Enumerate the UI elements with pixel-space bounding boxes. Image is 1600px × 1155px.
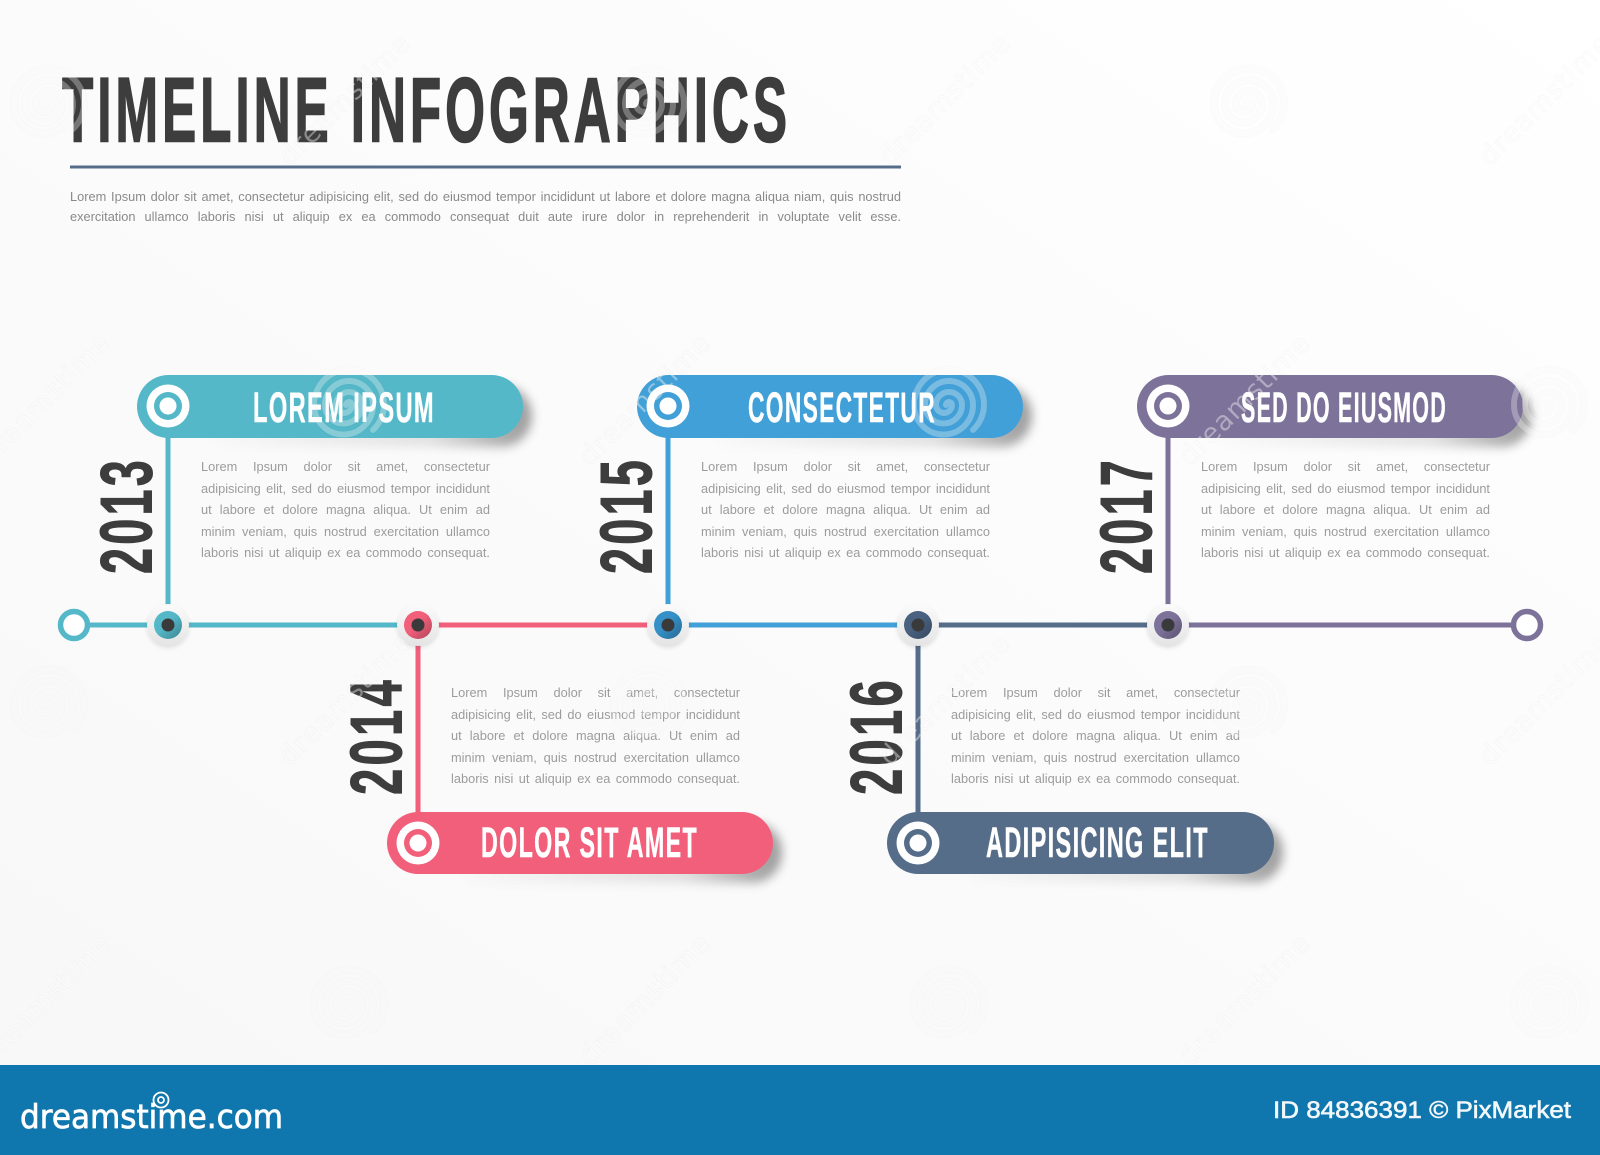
intro text: Lorem Ipsum dolor sit amet, consectetur adipisicing elit, sed do eiusmod tempor incididunt ut labore et dolore magna aliqua niam, quis nostrud — [70, 189, 901, 204]
body text: minim veniam, quis nostrud exercitation ullamco — [1201, 524, 1490, 539]
logo spiral — [154, 1092, 168, 1108]
connector — [1166, 430, 1170, 605]
body text: adipisicing elit, sed do eiusmod tempor incididunt — [201, 481, 490, 496]
body text: Lorem Ipsum dolor sit amet, consectetur — [1201, 459, 1490, 474]
logo wordmark: dreamstime.com — [20, 1097, 283, 1136]
body text: adipisicing elit, sed do eiusmod tempor incididunt — [701, 481, 990, 496]
footer bar — [0, 1065, 1600, 1155]
body text: adipisicing elit, sed do eiusmod tempor incididunt — [451, 707, 740, 722]
connector — [166, 430, 170, 605]
body text — [951, 682, 1240, 794]
body text: ut labore et dolore magna aliqua. Ut enim ad — [701, 502, 990, 517]
pill — [1137, 375, 1523, 438]
axis segment: slate — [918, 622, 1168, 628]
intro text — [70, 187, 901, 229]
connector — [916, 640, 920, 820]
connector — [666, 430, 670, 605]
pill icon — [1146, 384, 1190, 428]
axis segment: teal — [74, 622, 418, 628]
body text: minim veniam, quis nostrud exercitation ullamco — [951, 750, 1240, 765]
panel: 2017 sed do eiusmod — [1086, 375, 1532, 648]
body text: ut labore et dolore magna aliqua. Ut enim ad — [951, 728, 1240, 743]
pill — [137, 375, 523, 438]
end marker — [1514, 612, 1540, 638]
pill label: LOREM IPSUM — [253, 384, 435, 432]
watermark text: dreamstime — [873, 628, 1017, 772]
pill icon — [896, 822, 940, 864]
pill label: CONSECTETUR — [748, 384, 936, 432]
timeline axis — [74, 622, 1527, 628]
body text: laboris nisi ut aliquip ex ea commodo consequat. — [451, 771, 740, 786]
node — [397, 604, 439, 648]
panel: 2014 dolor sit amet — [336, 604, 782, 883]
watermark text: dreamstime — [273, 628, 417, 772]
body text: minim veniam, quis nostrud exercitation ullamco — [701, 524, 990, 539]
year: 2015 — [586, 457, 668, 574]
pill — [887, 812, 1274, 874]
body text — [1201, 456, 1490, 568]
body text: ut labore et dolore magna aliqua. Ut enim ad — [451, 728, 740, 743]
body text: minim veniam, quis nostrud exercitation ullamco — [451, 750, 740, 765]
year: 2014 — [336, 677, 418, 795]
body text: Lorem Ipsum dolor sit amet, consectetur — [951, 685, 1240, 700]
pill shadow — [1200, 385, 1532, 447]
body text: Lorem Ipsum dolor sit amet, consectetur — [201, 459, 490, 474]
pill icon — [646, 384, 690, 428]
pill — [637, 375, 1023, 438]
body text — [201, 456, 490, 568]
node — [647, 604, 689, 648]
node — [897, 604, 939, 648]
pill shadow — [950, 822, 1283, 883]
watermark text: dreamstime — [1173, 928, 1317, 1072]
body text: Lorem Ipsum dolor sit amet, consectetur — [451, 685, 740, 700]
pill shadow — [200, 385, 532, 447]
node — [147, 604, 189, 648]
watermark text: dreamstime — [573, 328, 717, 472]
pill icon — [146, 384, 190, 428]
body text: Lorem Ipsum dolor sit amet, consectetur — [701, 459, 990, 474]
title: TIMELINE INFOGRAPHICS — [62, 60, 791, 162]
intro text: exercitation ullamco laboris nisi ut aliquip ex ea commodo consequat duit aute irure dolor in reprehenderit in voluptate velit esse. — [70, 209, 901, 224]
pill shadow — [700, 385, 1032, 447]
pill label: DOLOR SIT AMET — [481, 819, 698, 867]
axis segment: red — [418, 622, 668, 628]
pill icon — [396, 822, 440, 864]
body text: laboris nisi ut aliquip ex ea commodo consequat. — [1201, 545, 1490, 560]
body text: ut labore et dolore magna aliqua. Ut enim ad — [201, 502, 490, 517]
watermark text: dreamstime — [273, 28, 417, 172]
pill — [387, 812, 773, 874]
body text: minim veniam, quis nostrud exercitation ullamco — [201, 524, 490, 539]
body text: ut labore et dolore magna aliqua. Ut enim ad — [1201, 502, 1490, 517]
start marker — [60, 612, 88, 638]
connector — [416, 640, 420, 820]
footer credit: ID 84836391 © PixMarket — [1273, 1097, 1571, 1124]
body text: laboris nisi ut aliquip ex ea commodo consequat. — [701, 545, 990, 560]
body text: adipisicing elit, sed do eiusmod tempor incididunt — [951, 707, 1240, 722]
node — [1147, 604, 1189, 648]
panel: 2013 lorem ipsum — [86, 375, 532, 648]
watermark text: dreamstime — [573, 928, 717, 1072]
footer logo — [20, 1092, 283, 1136]
year: 2016 — [836, 677, 918, 795]
body text — [451, 682, 740, 794]
watermark text: dreamstime — [873, 28, 1017, 172]
year: 2017 — [1086, 457, 1168, 574]
panel: 2016 adipisicing elit — [836, 604, 1283, 883]
title rule — [70, 166, 901, 168]
year: 2013 — [86, 457, 168, 574]
axis segment: purple — [1168, 622, 1527, 628]
body text: adipisicing elit, sed do eiusmod tempor incididunt — [1201, 481, 1490, 496]
watermark text: dreamstime — [1173, 328, 1317, 472]
body text: laboris nisi ut aliquip ex ea commodo consequat. — [951, 771, 1240, 786]
body text — [701, 456, 990, 568]
axis segment: blue — [668, 622, 918, 628]
pill shadow — [450, 822, 782, 883]
body text: laboris nisi ut aliquip ex ea commodo consequat. — [201, 545, 490, 560]
pill label: ADIPISICING ELIT — [986, 819, 1209, 867]
panel: 2015 consectetur — [586, 375, 1032, 648]
